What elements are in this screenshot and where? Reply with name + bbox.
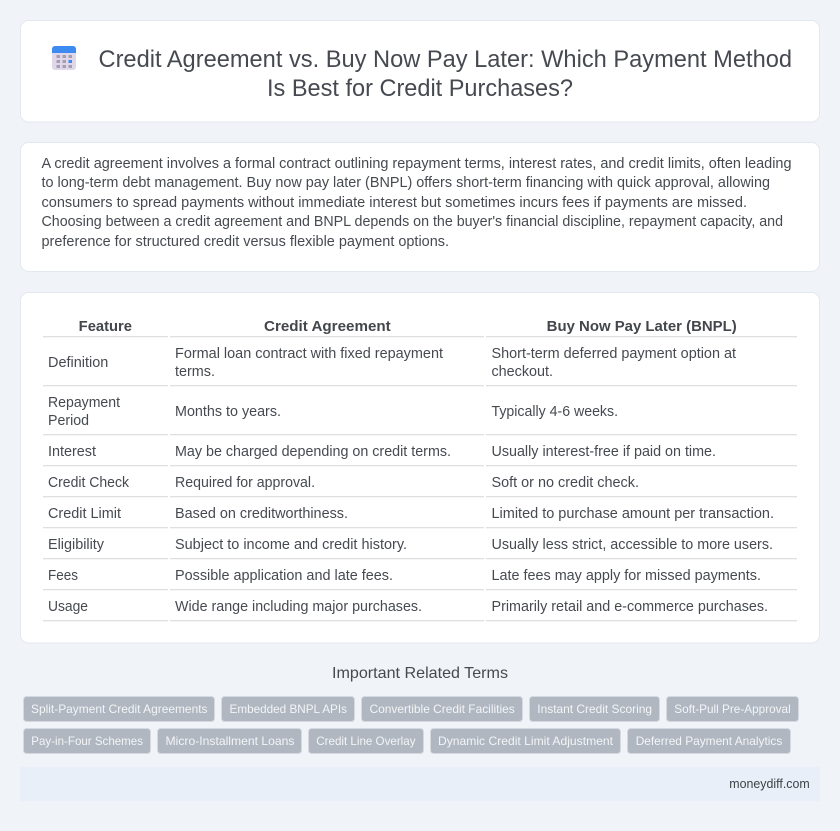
row: usage	[48, 599, 768, 615]
row: credit check: Required for approval.	[175, 475, 315, 491]
title: Credit Agreement vs. Buy Now Pay Later: Which Payment Method	[98, 46, 792, 73]
row: eligibility: Usually less strict, accessible to more users.	[492, 537, 773, 553]
text block: summary: consumers to spread payments without immediate interest but sometimes incurs fees if payments are missed.	[42, 195, 747, 211]
text block: summary: to long-term debt management. Buy now pay later (BNPL) offers short-term financing with quick approval, allowing	[42, 175, 770, 191]
tags: related terms: Pay-in-Four Schemes	[31, 734, 143, 748]
row: credit limit: Limited to purchase amount per transaction.	[492, 506, 774, 522]
text block: summary	[42, 156, 791, 250]
row: usage: Primarily retail and e-commerce purchases.	[492, 599, 768, 615]
row: fees: Late fees may apply for missed payments.	[492, 568, 761, 584]
row: interest	[48, 444, 716, 460]
row: interest: May be charged depending on credit terms.	[175, 444, 451, 460]
row: credit limit	[48, 506, 774, 522]
text block: summary: preference for structured credit versus flexible payment options.	[42, 234, 449, 250]
tags: related terms: Micro-Installment Loans	[166, 734, 294, 748]
row: definition: Formal loan contract with fixed repayment	[175, 346, 443, 362]
row: definition: terms.	[175, 364, 215, 380]
row: credit limit: Based on creditworthiness.	[175, 506, 348, 522]
text block: summary: A credit agreement involves a formal contract outlining repayment terms, interest rates, and credit limits, often leading	[42, 156, 791, 172]
tags: related terms: Dynamic Credit Limit Adjustment	[438, 734, 614, 748]
row: fees: Fees	[48, 568, 78, 584]
row: fees	[48, 568, 761, 584]
tags: related terms: Convertible Credit Facilities	[370, 702, 515, 716]
row: credit check	[48, 475, 639, 491]
row: repayment period: Period	[48, 413, 89, 429]
tags: related terms: Split-Payment Credit Agreements	[31, 702, 208, 716]
row: repayment period: Months to years.	[175, 404, 281, 420]
tags: related terms	[24, 696, 798, 754]
tags: related terms: Soft-Pull Pre-Approval	[674, 702, 791, 716]
row: repayment period: Repayment	[48, 395, 120, 411]
table header row	[79, 319, 737, 335]
table header row: Feature	[79, 319, 132, 335]
tags: related terms: Deferred Payment Analytics	[636, 734, 782, 748]
row: credit limit: Credit Limit	[48, 506, 121, 522]
tags: related terms: Embedded BNPL APIs	[230, 702, 347, 716]
heading: important related terms: Important Related Terms	[332, 665, 508, 682]
tags: related terms: Instant Credit Scoring	[537, 702, 652, 716]
footer	[20, 767, 820, 801]
row: eligibility	[48, 537, 773, 553]
table header row: Credit Agreement	[264, 319, 391, 335]
row: usage: Wide range including major purchases.	[175, 599, 422, 615]
panel: header	[20, 20, 820, 122]
text block: summary: Choosing between a credit agreement and BNPL depends on the buyer's financial discipline, repayment capacity, and	[42, 214, 783, 230]
row: eligibility: Subject to income and credit history.	[175, 537, 407, 553]
row: usage: Usage	[48, 599, 88, 615]
table header row: Buy Now Pay Later (BNPL)	[547, 319, 737, 335]
icon: calendar	[52, 46, 76, 70]
tags: related terms: Credit Line Overlay	[316, 734, 416, 748]
row: credit check: Soft or no credit check.	[492, 475, 639, 491]
footer: moneydiff.com	[729, 777, 810, 791]
row: fees: Possible application and late fees.	[175, 568, 393, 584]
row: interest: Interest	[48, 444, 96, 460]
title	[98, 46, 792, 102]
row: definition: Definition	[48, 355, 108, 371]
row: repayment period: Typically 4-6 weeks.	[492, 404, 618, 420]
row: definition	[48, 346, 736, 380]
row: credit check: Credit Check	[48, 475, 130, 491]
panel: intro paragraph	[20, 142, 820, 272]
row: eligibility: Eligibility	[48, 537, 105, 553]
panel: comparison table	[20, 292, 820, 643]
row: repayment period	[48, 395, 618, 429]
title: Is Best for Credit Purchases?	[267, 75, 573, 102]
row: definition: checkout.	[492, 364, 553, 380]
row: definition: Short-term deferred payment option at	[492, 346, 736, 362]
row: interest: Usually interest-free if paid on time.	[492, 444, 716, 460]
